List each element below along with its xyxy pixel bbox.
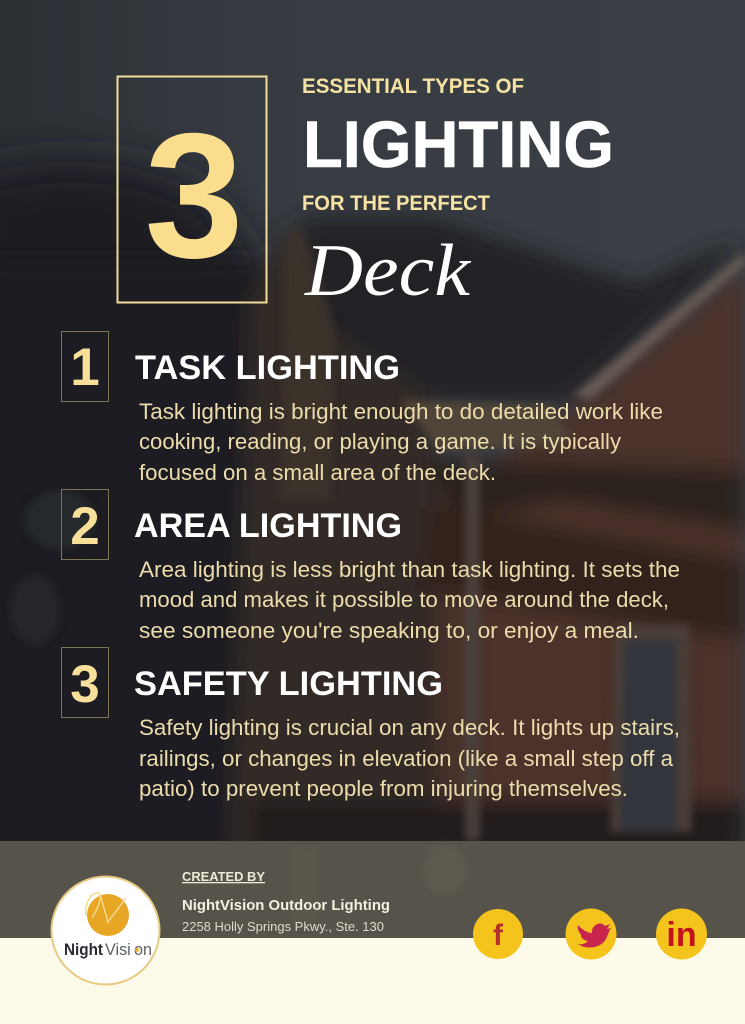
item 1: task lighting: 1: [70, 338, 100, 397]
logo badge: [52, 876, 160, 984]
title number box: [118, 76, 266, 302]
item 1: task lighting: TASK LIGHTING: [135, 349, 400, 387]
item 2: area lighting: mood and makes it possible to move around the deck,: [139, 587, 669, 612]
item 1: task lighting: Task lighting is bright enough to do detailed work like: [139, 399, 663, 424]
title: FOR THE PERFECT: [302, 192, 490, 215]
creator details: NightVision Outdoor Lighting: [182, 897, 390, 914]
item 3: safety lighting: SAFETY LIGHTING: [134, 665, 443, 703]
item 1: task lighting: focused on a small area of the deck.: [139, 460, 496, 485]
creator details: 2258 Holly Springs Pkwy., Ste. 130: [182, 919, 384, 934]
icon: facebook: [473, 909, 523, 959]
item 3: safety lighting: Safety lighting is crucial on any deck. It lights up stairs,: [139, 715, 680, 740]
title: ESSENTIAL TYPES OF: [302, 75, 524, 98]
item 1: task lighting: [62, 332, 663, 485]
item 2: area lighting: 2: [70, 497, 100, 556]
creator details: [182, 869, 390, 934]
item 3: safety lighting: [62, 648, 680, 801]
item 2: area lighting: [62, 490, 680, 643]
icon: facebook: f: [493, 919, 504, 952]
logo badge: Visi on: [105, 940, 152, 959]
item 3: safety lighting: patio) to prevent people from injuring themselves.: [139, 776, 628, 801]
item 2: area lighting: AREA LIGHTING: [134, 507, 402, 545]
logo badge: Night: [64, 940, 103, 959]
item 2: area lighting: see someone you're speaking to, or enjoy a meal.: [139, 618, 639, 643]
icon: linkedin: [656, 908, 707, 960]
footer band: [0, 841, 745, 1024]
icon: linkedin: in: [666, 916, 697, 954]
item 2: area lighting: Area lighting is less bright than task lighting. It sets the: [139, 557, 680, 582]
title: [302, 75, 614, 312]
creator details: CREATED BY: [182, 869, 265, 884]
title number box: 3: [144, 96, 244, 295]
icon: twitter: [566, 908, 616, 960]
title: Deck: [304, 230, 471, 312]
item 3: safety lighting: railings, or changes in elevation (like a small step off a: [139, 746, 674, 771]
item 1: task lighting: cooking, reading, or playing a game. It is typically: [139, 429, 621, 454]
item 3: safety lighting: 3: [70, 655, 100, 714]
title: LIGHTING: [303, 107, 614, 181]
